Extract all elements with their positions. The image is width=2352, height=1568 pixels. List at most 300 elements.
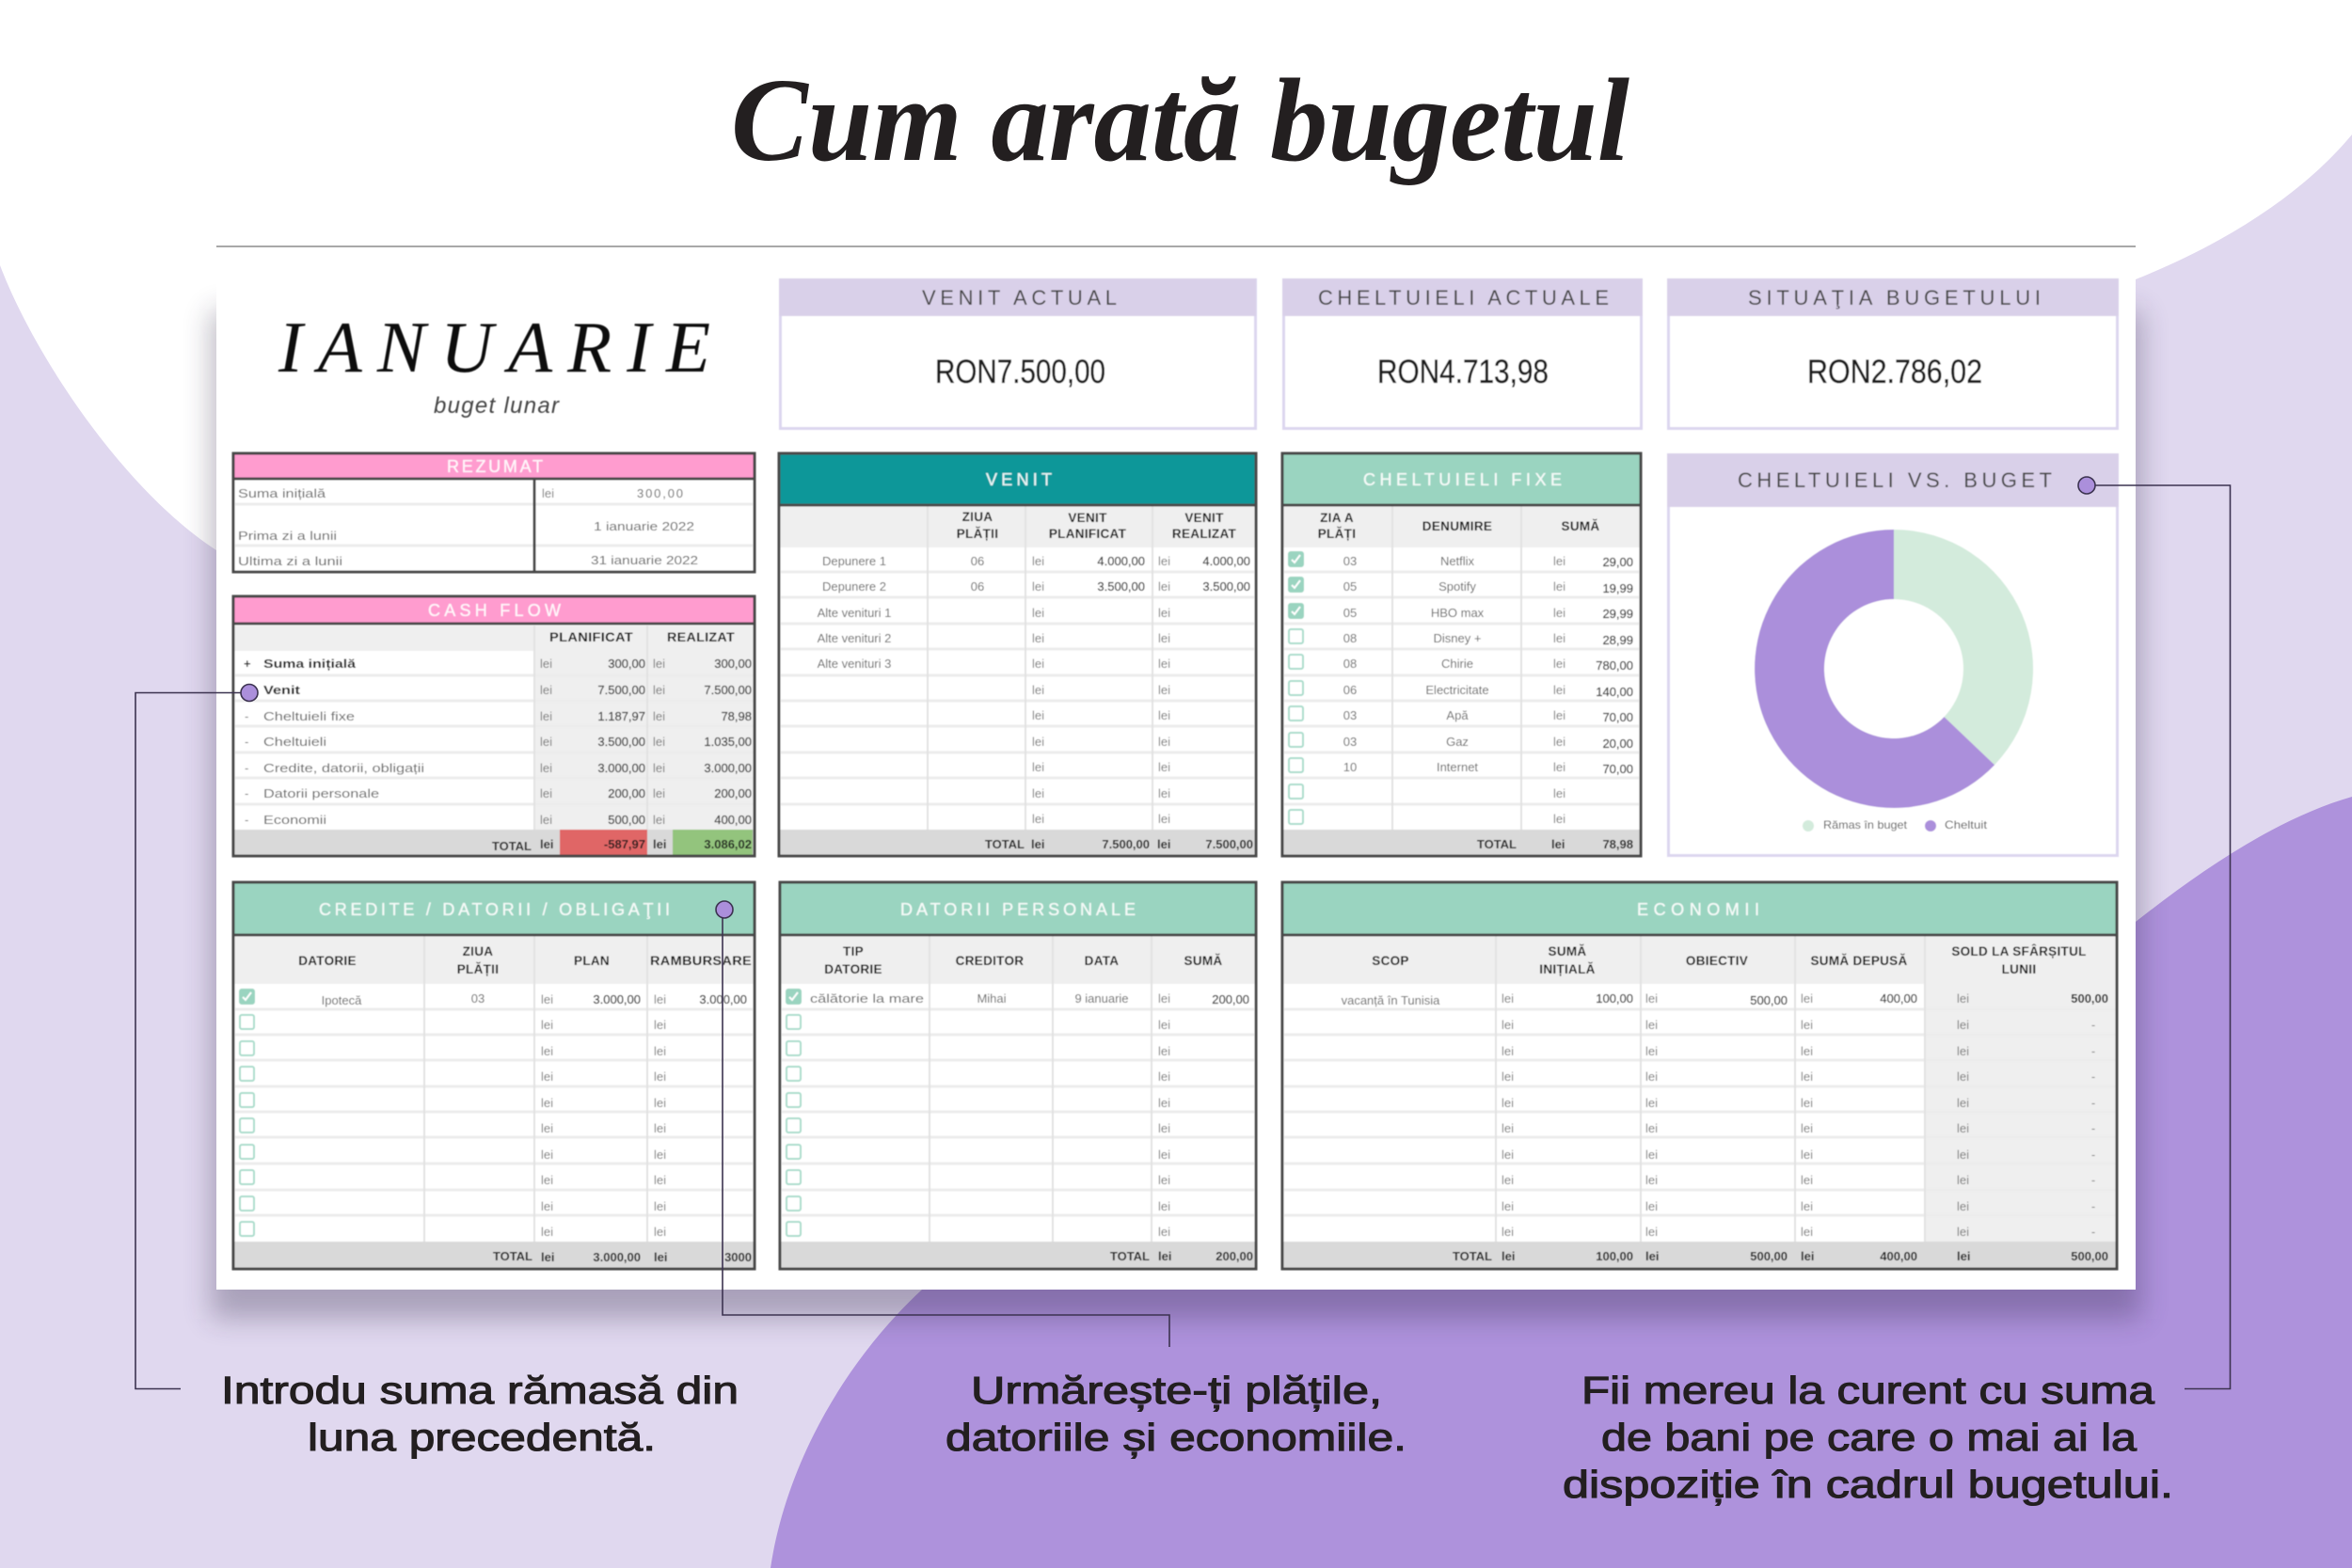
table: economii: lei (1645, 1173, 1658, 1187)
table: venit: lei (1158, 708, 1170, 722)
table: cheltuieli fixe: 08 (1343, 631, 1357, 645)
kpi: venit actual: VENIT ACTUAL (922, 286, 1117, 309)
table: economii: lei (1957, 1069, 1969, 1084)
chart panel: cheltuieli vs. buget: CHELTUIELI VS. BUGET (1738, 468, 2052, 492)
table: venit: lei (1157, 837, 1170, 851)
table: datorii personale: TOTAL (1110, 1249, 1150, 1263)
table: cash flow: 300,00 (608, 657, 645, 671)
table: venit: 3.500,00 (1202, 579, 1250, 594)
table: venit: lei (1158, 786, 1170, 800)
table: cash flow (233, 596, 755, 856)
kpi: cheltuieli actuale: CHELTUIELI ACTUALE (1318, 286, 1609, 309)
table: venit: Alte venituri 1 (818, 606, 891, 620)
table: cheltuieli fixe: 20,00 (1602, 736, 1633, 751)
table: cheltuieli fixe: 28,99 (1602, 633, 1633, 647)
table: economii: lei (1502, 1018, 1514, 1032)
table: cash flow: + (244, 657, 251, 671)
table: credite / datorii / obligatii: PLAN (574, 954, 610, 968)
table: datorii personale: SUMĂ (1184, 954, 1222, 968)
table: cheltuieli fixe: 70,00 (1602, 762, 1633, 776)
table: venit: lei (1032, 579, 1044, 594)
table: economii: lei (1645, 1018, 1658, 1032)
table: datorii personale: DATORII PERSONALE (900, 900, 1136, 919)
table: economii: lei (1801, 1199, 1813, 1213)
table: datorii personale: Mihai (977, 991, 1007, 1006)
kpi: cheltuieli actuale: RON4.713,98 (1377, 354, 1549, 390)
kpi: venit actual (779, 278, 1256, 429)
callout: middle: Urmărește-ți plățile, (971, 1369, 1382, 1412)
table: venit: 3.500,00 (1097, 579, 1145, 594)
table: cash flow: 78,98 (721, 709, 752, 723)
table: cash flow: - (245, 813, 248, 827)
table: credite / datorii / obligatii: lei (541, 1148, 553, 1162)
table: cheltuieli fixe: PLĂȚI (1318, 527, 1356, 541)
table: credite / datorii / obligatii (233, 882, 755, 1269)
table: cheltuieli fixe: Internet (1437, 760, 1478, 774)
table: cheltuieli fixe: DENUMIRE (1422, 519, 1492, 533)
table: cheltuieli fixe: 03 (1343, 735, 1357, 749)
table: cash flow: TOTAL (492, 839, 532, 853)
table: cash flow: lei (540, 837, 553, 851)
table: cash flow: lei (540, 813, 552, 827)
table: economii: 500,00 (2071, 991, 2108, 1006)
table: credite / datorii / obligatii: lei (541, 1250, 554, 1264)
table: cash flow: 500,00 (608, 813, 645, 827)
background: white top shape (0, 0, 2352, 550)
table: cash flow: 200,00 (714, 786, 752, 800)
table: rezumat: 300,00 (637, 486, 683, 500)
table: cheltuieli fixe: Apă (1446, 708, 1469, 722)
table: credite / datorii / obligatii: lei (654, 1199, 666, 1213)
table: cash flow: - (245, 786, 248, 800)
table: cheltuieli fixe: lei (1553, 657, 1565, 671)
table: venit: lei (1158, 579, 1170, 594)
table: cash flow: 3.500,00 (597, 735, 645, 749)
table: economii: ECONOMII (1637, 900, 1759, 919)
table: economii: lei (1957, 1249, 1970, 1263)
table: cheltuieli fixe: Chirie (1441, 657, 1473, 671)
table: cheltuieli fixe: Electricitate (1425, 683, 1489, 697)
table: cash flow: Cheltuieli (263, 735, 326, 749)
table: venit: lei (1032, 760, 1044, 774)
kpi: cheltuieli actuale (1282, 278, 1643, 429)
table: venit: lei (1158, 760, 1170, 774)
table: datorii personale: 200,00 (1212, 992, 1249, 1006)
table: venit: 06 (971, 579, 984, 594)
callout: right: dispoziție în cadrul bugetului. (1563, 1463, 2173, 1506)
table: economii: lei (1645, 1069, 1658, 1084)
table: economii: - (2091, 1044, 2095, 1058)
callout: middle (946, 1369, 1406, 1459)
table: venit: Depunere 2 (822, 579, 886, 594)
table: cash flow: lei (540, 735, 552, 749)
table: economii: 400,00 (1880, 991, 1917, 1006)
chart panel: cheltuieli vs. buget (1667, 453, 2119, 856)
table: cash flow: - (245, 735, 248, 749)
table: economii: 100,00 (1596, 1249, 1633, 1263)
table: cash flow: REALIZAT (667, 630, 735, 644)
table: economii: lei (1957, 1096, 1969, 1110)
table: credite / datorii / obligatii: lei (654, 992, 666, 1006)
table: rezumat: Ultima zi a lunii (238, 554, 342, 568)
table: cash flow: 1.187,97 (597, 709, 645, 723)
table: datorii personale: lei (1158, 1199, 1170, 1213)
table: datorii personale: TIP (843, 944, 864, 958)
table: venit: lei (1158, 683, 1170, 697)
table: venit: 06 (971, 554, 984, 568)
table: credite / datorii / obligatii: lei (654, 1173, 666, 1187)
table: economii: - (2091, 1173, 2095, 1187)
table: cash flow: - (245, 761, 248, 775)
table: cash flow: 7.500,00 (597, 683, 645, 697)
table: economii: lei (1957, 1148, 1969, 1162)
table: cash flow: lei (540, 657, 552, 671)
kpi: situatia bugetului: SITUAŢIA BUGETULUI (1748, 286, 2041, 309)
table: venit: lei (1032, 606, 1044, 620)
table: venit: Alte venituri 2 (818, 631, 891, 645)
table: datorii personale: lei (1158, 1044, 1170, 1058)
month heading: buget lunar (434, 393, 560, 419)
table: economii: lei (1801, 1121, 1813, 1135)
panel shadow (211, 310, 2141, 1319)
table: economii: lei (1957, 1225, 1969, 1239)
table: cash flow: 3.000,00 (704, 761, 752, 775)
table: venit: lei (1032, 657, 1044, 671)
callout: right: de bani pe care o mai ai la (1601, 1416, 2137, 1459)
table: economii: SOLD LA SFÂRȘITUL (1951, 944, 2087, 958)
table: cheltuieli fixe: TOTAL (1477, 837, 1517, 851)
table: credite / datorii / obligatii: lei (654, 1225, 666, 1239)
table: economii: lei (1645, 1249, 1659, 1263)
table: cash flow: Venit (263, 683, 301, 697)
table: rezumat: 1 ianuarie 2022 (594, 519, 694, 533)
table: economii: - (2091, 1018, 2095, 1032)
table: credite / datorii / obligatii: lei (541, 1018, 553, 1032)
table: credite / datorii / obligatii: RAMBURSARE (650, 954, 752, 968)
table: cheltuieli fixe: HBO max (1431, 606, 1485, 620)
table: credite / datorii / obligatii: lei (541, 1069, 553, 1084)
table: cash flow: lei (653, 683, 665, 697)
kpi: venit actual: RON7.500,00 (935, 354, 1105, 390)
table: economii: lei (1801, 1225, 1813, 1239)
table: credite / datorii / obligatii: TOTAL (493, 1249, 532, 1263)
table: credite / datorii / obligatii: lei (654, 1148, 666, 1162)
table: datorii personale: lei (1158, 991, 1170, 1006)
table: credite / datorii / obligatii: lei (654, 1121, 666, 1135)
table: cash flow: lei (653, 761, 665, 775)
table: cash flow: - (245, 709, 248, 723)
table: cheltuieli fixe (1282, 453, 1641, 856)
table: cheltuieli fixe: lei (1553, 683, 1565, 697)
table: economii: - (2091, 1148, 2095, 1162)
kpi: situatia bugetului: RON2.786,02 (1807, 354, 1982, 390)
table: datorii personale: CREDITOR (956, 954, 1024, 968)
table: venit: lei (1032, 735, 1044, 749)
table: cash flow: 3.000,00 (597, 761, 645, 775)
table: venit: lei (1032, 708, 1044, 722)
chart legend: Rămas în buget (1823, 818, 1908, 832)
table: venit: lei (1158, 735, 1170, 749)
table: credite / datorii / obligatii: 3000 (724, 1250, 752, 1264)
table: cheltuieli fixe: ZIA A (1320, 511, 1354, 525)
table: cheltuieli fixe: 78,98 (1602, 837, 1633, 851)
table: credite / datorii / obligatii: DATORIE (298, 954, 357, 968)
table: datorii personale: DATA (1085, 954, 1119, 968)
table: venit: lei (1032, 631, 1044, 645)
table: venit (779, 453, 1256, 856)
table: cheltuieli fixe: lei (1553, 760, 1565, 774)
month heading: IANUARIE (278, 307, 710, 388)
table: economii: SCOP (1372, 954, 1409, 968)
table: venit: VENIT (1068, 511, 1107, 525)
table: credite / datorii / obligatii: lei (541, 1096, 553, 1110)
table: venit: 4.000,00 (1097, 554, 1145, 568)
table: cheltuieli fixe: 08 (1343, 657, 1357, 671)
table: cash flow: lei (653, 735, 665, 749)
table: economii: INIȚIALĂ (1539, 962, 1596, 976)
table: cheltuieli fixe: SUMĂ (1562, 519, 1599, 533)
table: economii: lei (1801, 1148, 1813, 1162)
table: rezumat: 31 ianuarie 2022 (591, 553, 698, 567)
table: cash flow: 1.035,00 (704, 735, 752, 749)
table: economii: 400,00 (1880, 1249, 1917, 1263)
donut chart (1755, 530, 2033, 808)
table: datorii personale: lei (1158, 1069, 1170, 1084)
table: venit: lei (1031, 837, 1044, 851)
table: credite / datorii / obligatii: lei (541, 1225, 553, 1239)
table: credite / datorii / obligatii: ZIUA (463, 944, 493, 958)
table: cash flow: 7.500,00 (704, 683, 752, 697)
table: credite / datorii / obligatii: lei (654, 1044, 666, 1058)
table: cash flow: lei (653, 813, 665, 827)
table: rezumat: Suma inițială (238, 486, 326, 500)
table: economii: lei (1502, 1121, 1514, 1135)
table: venit: ZIUA (962, 510, 993, 524)
table: cheltuieli fixe: 03 (1343, 554, 1357, 568)
table: economii: lei (1957, 1044, 1969, 1058)
chart legend (1803, 818, 1988, 832)
table: economii: SUMĂ DEPUSĂ (1810, 954, 1908, 968)
table: economii: lei (1801, 991, 1813, 1006)
table: cheltuieli fixe: lei (1551, 837, 1565, 851)
table: economii: SUMĂ (1549, 944, 1586, 958)
table: economii: lei (1645, 1096, 1658, 1110)
table: cash flow: 200,00 (608, 786, 645, 800)
table: economii: OBIECTIV (1686, 954, 1748, 968)
table: credite / datorii / obligatii: lei (654, 1069, 666, 1084)
table: credite / datorii / obligatii: lei (541, 1173, 553, 1187)
table: cheltuieli fixe: lei (1553, 786, 1565, 800)
table: venit: lei (1032, 554, 1044, 568)
table: cheltuieli fixe: 05 (1343, 606, 1357, 620)
table: cash flow: Economii (263, 813, 326, 827)
arrow: right callout connector (2078, 477, 2230, 1388)
table: economii: lei (1645, 1148, 1658, 1162)
table: venit: PLANIFICAT (1049, 527, 1127, 541)
table: economii: lei (1801, 1044, 1813, 1058)
table: datorii personale (780, 882, 1256, 1269)
table: rezumat: REZUMAT (447, 457, 543, 476)
table: economii: - (2091, 1199, 2095, 1213)
table: venit: lei (1032, 683, 1044, 697)
table: economii: lei (1502, 1096, 1514, 1110)
table: venit: lei (1158, 631, 1170, 645)
table: cheltuieli fixe: 29,99 (1602, 607, 1633, 621)
table: economii: lei (1502, 1173, 1514, 1187)
table: datorii personale: lei (1158, 1148, 1170, 1162)
table: economii: 100,00 (1596, 991, 1633, 1006)
table: economii: lei (1502, 1044, 1514, 1058)
table: rezumat: lei (542, 486, 554, 500)
table: credite / datorii / obligatii: lei (654, 1250, 667, 1264)
callout: left: Introdu suma rămasă din (221, 1369, 739, 1412)
table: credite / datorii / obligatii: lei (541, 992, 553, 1006)
callout: right: Fii mereu la curent cu suma (1581, 1369, 2154, 1412)
table: economii: lei (1645, 1225, 1658, 1239)
table: datorii personale: lei (1158, 1225, 1170, 1239)
table: credite / datorii / obligatii: PLĂȚII (457, 962, 499, 976)
background: purple bottom shape (771, 797, 2352, 1568)
table: cash flow: lei (653, 786, 665, 800)
table: economii: - (2091, 1069, 2095, 1084)
table: cash flow: lei (540, 761, 552, 775)
table: economii: - (2091, 1121, 2095, 1135)
table: cash flow: CASH FLOW (428, 601, 561, 620)
table: cheltuieli fixe: 19,99 (1602, 581, 1633, 595)
table: cheltuieli fixe: 140,00 (1596, 685, 1633, 699)
table: economii: lei (1957, 1173, 1969, 1187)
table: economii: lei (1645, 1199, 1658, 1213)
table: venit: 7.500,00 (1102, 837, 1150, 851)
table: venit: Depunere 1 (822, 554, 886, 568)
table: economii: lei (1801, 1249, 1814, 1263)
kpi: situatia bugetului (1667, 278, 2119, 429)
table: credite / datorii / obligatii: lei (541, 1121, 553, 1135)
callout: left (221, 1369, 739, 1459)
table: datorii personale: lei (1158, 1173, 1170, 1187)
table: cash flow: Datorii personale (263, 786, 379, 800)
table: cheltuieli fixe: lei (1553, 735, 1565, 749)
table: economii: 500,00 (1750, 1249, 1788, 1263)
table: economii: lei (1957, 991, 1969, 1006)
table: credite / datorii / obligatii: 3.000,00 (593, 992, 641, 1006)
title: Cum arată bugetul (731, 55, 1629, 186)
table: economii: lei (1645, 1121, 1658, 1135)
table: rezumat (233, 453, 755, 572)
table: venit: VENIT (1184, 511, 1224, 525)
table: datorii personale: 200,00 (1216, 1249, 1253, 1263)
table: credite / datorii / obligatii: lei (541, 1044, 553, 1058)
table: cheltuieli fixe: lei (1553, 606, 1565, 620)
table: economii: 500,00 (1750, 993, 1788, 1007)
table: credite / datorii / obligatii: 3.000,00 (593, 1250, 641, 1264)
table: venit: VENIT (986, 470, 1052, 489)
table: credite / datorii / obligatii: lei (654, 1018, 666, 1032)
table: cheltuieli fixe: lei (1553, 708, 1565, 722)
table: cash flow: lei (653, 709, 665, 723)
table: datorii personale: lei (1158, 1096, 1170, 1110)
table: cash flow: Cheltuieli fixe (263, 709, 355, 723)
table: cheltuieli fixe: 06 (1343, 683, 1357, 697)
table: datorii personale: lei (1158, 1121, 1170, 1135)
table: economii: lei (1502, 1249, 1515, 1263)
table: datorii personale: călătorie la mare (810, 991, 924, 1006)
table: cheltuieli fixe: lei (1553, 812, 1565, 826)
table: credite / datorii / obligatii: lei (654, 1096, 666, 1110)
table: economii: LUNII (2002, 962, 2036, 976)
table: economii (1282, 882, 2117, 1269)
table: cheltuieli fixe: 03 (1343, 708, 1357, 722)
table: economii: lei (1801, 1069, 1813, 1084)
table: economii: - (2091, 1096, 2095, 1110)
table: cheltuieli fixe: CHELTUIELI FIXE (1363, 470, 1562, 489)
table: cash flow: lei (653, 657, 665, 671)
table: cash flow: lei (540, 709, 552, 723)
table: cash flow: lei (540, 786, 552, 800)
table: economii: lei (1502, 1225, 1514, 1239)
table: cash flow: 400,00 (714, 813, 752, 827)
table: economii: vacanță în Tunisia (1342, 993, 1440, 1007)
panel: budget sheet (216, 246, 2136, 1290)
table: economii: lei (1801, 1173, 1813, 1187)
arrow: middle callout connector (716, 901, 1169, 1347)
table: economii: lei (1645, 991, 1658, 1006)
arrow: left callout connector (135, 685, 258, 1388)
table: cash flow: lei (540, 683, 552, 697)
table: datorii personale: lei (1158, 1249, 1171, 1263)
table: credite / datorii / obligatii: lei (541, 1199, 553, 1213)
table: economii: lei (1801, 1096, 1813, 1110)
table: cheltuieli fixe: lei (1553, 554, 1565, 568)
table: cheltuieli fixe: lei (1553, 579, 1565, 594)
table: economii: lei (1801, 1018, 1813, 1032)
table: venit: REALIZAT (1172, 527, 1237, 541)
table: cheltuieli fixe: 29,00 (1602, 555, 1633, 569)
table: cheltuieli fixe: 780,00 (1596, 658, 1633, 673)
callout: right (1563, 1369, 2173, 1506)
table: rezumat: Prima zi a lunii (238, 529, 337, 543)
table: venit: lei (1158, 606, 1170, 620)
table: venit: lei (1158, 554, 1170, 568)
table: cheltuieli fixe: lei (1553, 631, 1565, 645)
table: credite / datorii / obligatii: 03 (471, 991, 485, 1006)
table: cash flow: lei (653, 837, 666, 851)
table: cash flow: Suma inițială (263, 657, 357, 671)
table: economii: lei (1502, 1199, 1514, 1213)
table: credite / datorii / obligatii: 3.000,00 (699, 992, 747, 1006)
table: economii: lei (1957, 1199, 1969, 1213)
table: venit: 4.000,00 (1202, 554, 1250, 568)
table: economii: 500,00 (2071, 1249, 2108, 1263)
table: cheltuieli fixe: 10 (1343, 760, 1357, 774)
table: venit: lei (1032, 812, 1044, 826)
chart legend: Cheltuit (1945, 818, 1988, 832)
table: credite / datorii / obligatii: Ipotecă (322, 993, 362, 1007)
table: economii: - (2091, 1225, 2095, 1239)
callout: middle: datoriile și economiile. (946, 1416, 1406, 1459)
table: datorii personale: 9 ianuarie (1074, 991, 1129, 1006)
table: cheltuieli fixe: 70,00 (1602, 710, 1633, 724)
table: cash flow: PLANIFICAT (549, 630, 633, 644)
table: datorii personale: DATORIE (824, 962, 882, 976)
table: economii: lei (1502, 1069, 1514, 1084)
table: economii: lei (1502, 1148, 1514, 1162)
table: economii: TOTAL (1453, 1249, 1492, 1263)
table: venit: 7.500,00 (1205, 837, 1253, 851)
table: cheltuieli fixe: 05 (1343, 579, 1357, 594)
table: venit: Alte venituri 3 (818, 657, 891, 671)
table: cash flow: 300,00 (714, 657, 752, 671)
